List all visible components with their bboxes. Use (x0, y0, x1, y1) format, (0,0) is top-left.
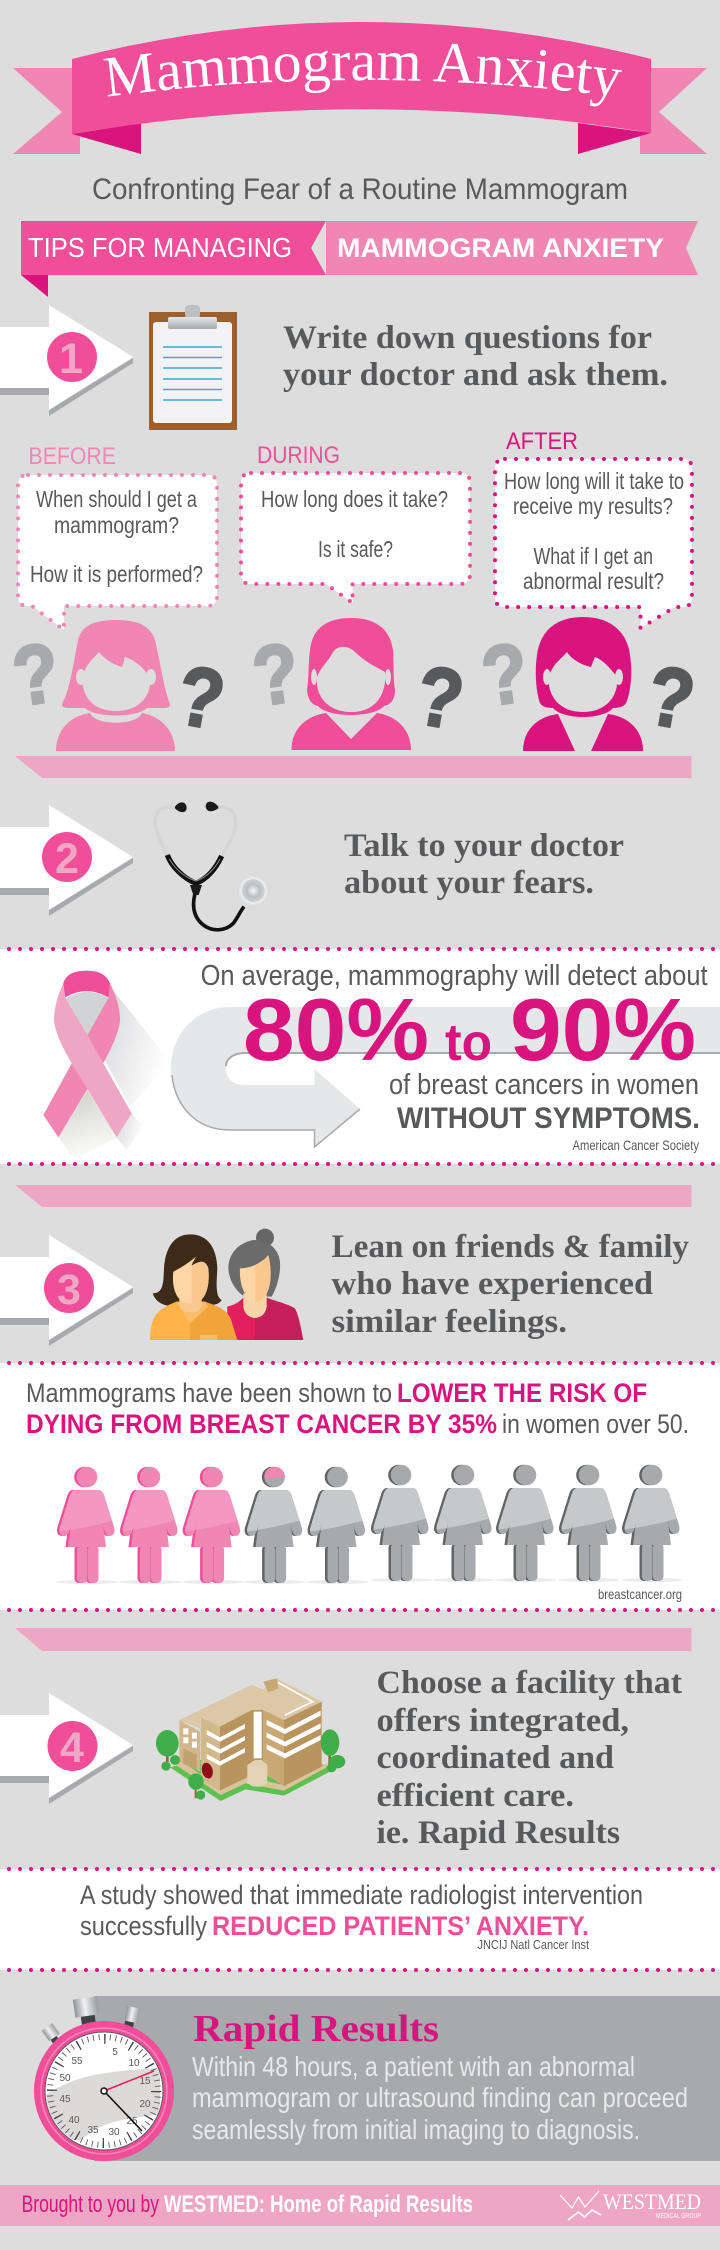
heading: step 4 (376, 1665, 682, 1851)
older woman (227, 1229, 303, 1340)
after column (476, 428, 702, 751)
ticks (50, 2037, 158, 2145)
ribbon right part (326, 221, 698, 275)
dial numbers: 50 (59, 2073, 71, 2084)
dial numbers: 25 (126, 2116, 138, 2127)
footer text: Brought to you by (22, 2191, 159, 2218)
step 2 arrow: 2 (55, 835, 79, 883)
step 4 arrow: 4 (60, 1724, 84, 1772)
icon: friends and family (150, 1229, 303, 1340)
speech bubble: How it is performed? (30, 561, 203, 587)
speech bubble: When should I get a (36, 486, 197, 512)
pink strip (15, 1628, 692, 1651)
banner folds (72, 123, 651, 154)
stat text (26, 1378, 689, 1439)
ribbon fold (21, 275, 48, 297)
logo: westmed (560, 2189, 701, 2220)
study text: JNCIJ Natl Cancer Inst (478, 1937, 589, 1952)
woman icon (523, 617, 643, 751)
body text: Within 48 hours, a patient with an abnormal (192, 2051, 635, 2082)
dial numbers: 55 (71, 2056, 83, 2067)
stat text: Mammograms have been shown to (26, 1378, 392, 1408)
speech bubble: What if I get an (534, 543, 653, 569)
dial numbers: 20 (139, 2099, 151, 2110)
woman icon (56, 620, 175, 751)
dial numbers: 40 (68, 2115, 80, 2126)
logo: westmed: MEDICAL GROUP (656, 2213, 701, 2220)
ribbon left part (21, 221, 326, 275)
banner body (72, 22, 651, 134)
pictogram: ten women (56, 1465, 683, 1584)
stat text: 90% (510, 980, 696, 1079)
icon: clipboard (149, 305, 237, 430)
stat text: WITHOUT SYMPTOMS. (397, 1102, 700, 1135)
step 3 arrow: 3 (57, 1266, 81, 1314)
speech bubble: receive my results? (513, 493, 673, 519)
stat text (201, 960, 708, 1153)
speech bubble (18, 475, 217, 630)
title banner (13, 22, 707, 154)
u-turn arrow (171, 1007, 720, 1147)
study text: REDUCED PATIENTS’ ANXIETY. (212, 1911, 589, 1941)
heading: step 4: ie. Rapid Results (376, 1815, 620, 1851)
tips ribbon (21, 221, 698, 297)
speech bubble: How long does it take? (261, 486, 448, 512)
stat text: LOWER THE RISK OF (397, 1378, 647, 1408)
step 1 arrow: 1 (59, 335, 83, 383)
panel: rapid results (34, 1996, 720, 2161)
study text: A study showed that immediate radiologist intervention (80, 1880, 643, 1910)
heading: step 4: coordinated and (376, 1740, 614, 1776)
ribbon text right: MAMMOGRAM ANXIETY (337, 233, 664, 263)
panel: study (0, 1869, 720, 1970)
stat text: DYING FROM BREAST CANCER BY 35% (26, 1409, 497, 1439)
study text (80, 1880, 643, 1952)
dial numbers: 5 (112, 2047, 118, 2058)
step 1 arrow (0, 305, 133, 416)
heading: step 4: offers integrated, (376, 1703, 629, 1739)
subtitle: Confronting Fear of a Routine Mammogram (92, 173, 628, 206)
heading: step 3 (332, 1229, 689, 1340)
heading: step 2: about your fears. (344, 865, 594, 901)
question marks: ? (641, 647, 702, 748)
panel: detection stat (0, 949, 720, 1164)
ribbon text left: TIPS FOR MANAGING (28, 232, 292, 263)
banner tails (13, 68, 707, 154)
dial numbers (59, 2047, 151, 2138)
question marks: ? (476, 624, 534, 724)
step 4 arrow (0, 1693, 133, 1804)
hands (104, 2071, 154, 2091)
before column (7, 443, 232, 751)
woman icon (292, 618, 411, 750)
dial numbers: 15 (139, 2076, 151, 2087)
dial numbers: 30 (108, 2127, 120, 2138)
heading: step 3: Lean on friends & family (332, 1229, 689, 1265)
dial numbers: 35 (87, 2125, 99, 2136)
speech bubble: Is it safe? (318, 536, 393, 562)
pink strip (15, 1185, 692, 1207)
step 3 arrow (0, 1235, 133, 1346)
stat text: 80% (243, 980, 429, 1079)
label: DURING (257, 442, 340, 469)
source: breastcancer.org (598, 1586, 682, 1602)
body text (192, 2051, 688, 2145)
buttons (42, 1996, 140, 2044)
heading: Rapid Results (193, 2008, 439, 2050)
heading: step 1: your doctor and ask them. (283, 357, 668, 393)
label: AFTER (506, 428, 578, 455)
heading: step 3: similar feelings. (332, 1304, 567, 1340)
stat text: to (445, 1014, 492, 1072)
heading: step 2 (344, 828, 624, 901)
question marks (247, 624, 471, 748)
icon: stethoscope (155, 802, 270, 930)
footer bold text: WESTMED: Home of Rapid Results (164, 2191, 473, 2218)
question marks (476, 624, 702, 748)
logo: westmed: WESTMED (603, 2189, 701, 2214)
footer band (0, 2185, 720, 2226)
icon: stopwatch (34, 1996, 174, 2161)
question marks: ? (410, 647, 471, 748)
question marks: ? (7, 624, 65, 724)
dial swoosh (40, 2068, 160, 2140)
icon: hospital (156, 1678, 345, 1801)
question marks: ? (171, 647, 232, 748)
pink strip (15, 756, 692, 778)
stat text: in women over 50. (502, 1409, 689, 1439)
title: Mammogram Anxiety (104, 44, 622, 106)
question marks: ? (247, 624, 305, 724)
heading: step 3: who have experienced (332, 1266, 653, 1302)
label: BEFORE (28, 443, 116, 470)
step 2 arrow (0, 805, 133, 916)
heading: step 2: Talk to your doctor (344, 828, 624, 864)
panel: risk stat (0, 1363, 720, 1610)
during column (241, 442, 471, 750)
question marks (7, 624, 232, 748)
heading: step 4: efficient care. (376, 1778, 574, 1814)
younger woman (150, 1234, 237, 1340)
study text: successfully (80, 1911, 207, 1941)
dial numbers: 10 (128, 2058, 140, 2069)
speech bubble: abnormal result? (523, 568, 664, 594)
speech bubble: mammogram? (54, 512, 179, 538)
speech bubble (241, 473, 470, 603)
icon: pink ribbon (43, 971, 170, 1160)
heading: step 4: Choose a facility that (376, 1665, 682, 1701)
heading: step 1: Write down questions for (283, 320, 652, 356)
dial numbers: 45 (59, 2094, 71, 2105)
speech bubble (495, 459, 692, 628)
heading: step 1 (283, 320, 668, 393)
